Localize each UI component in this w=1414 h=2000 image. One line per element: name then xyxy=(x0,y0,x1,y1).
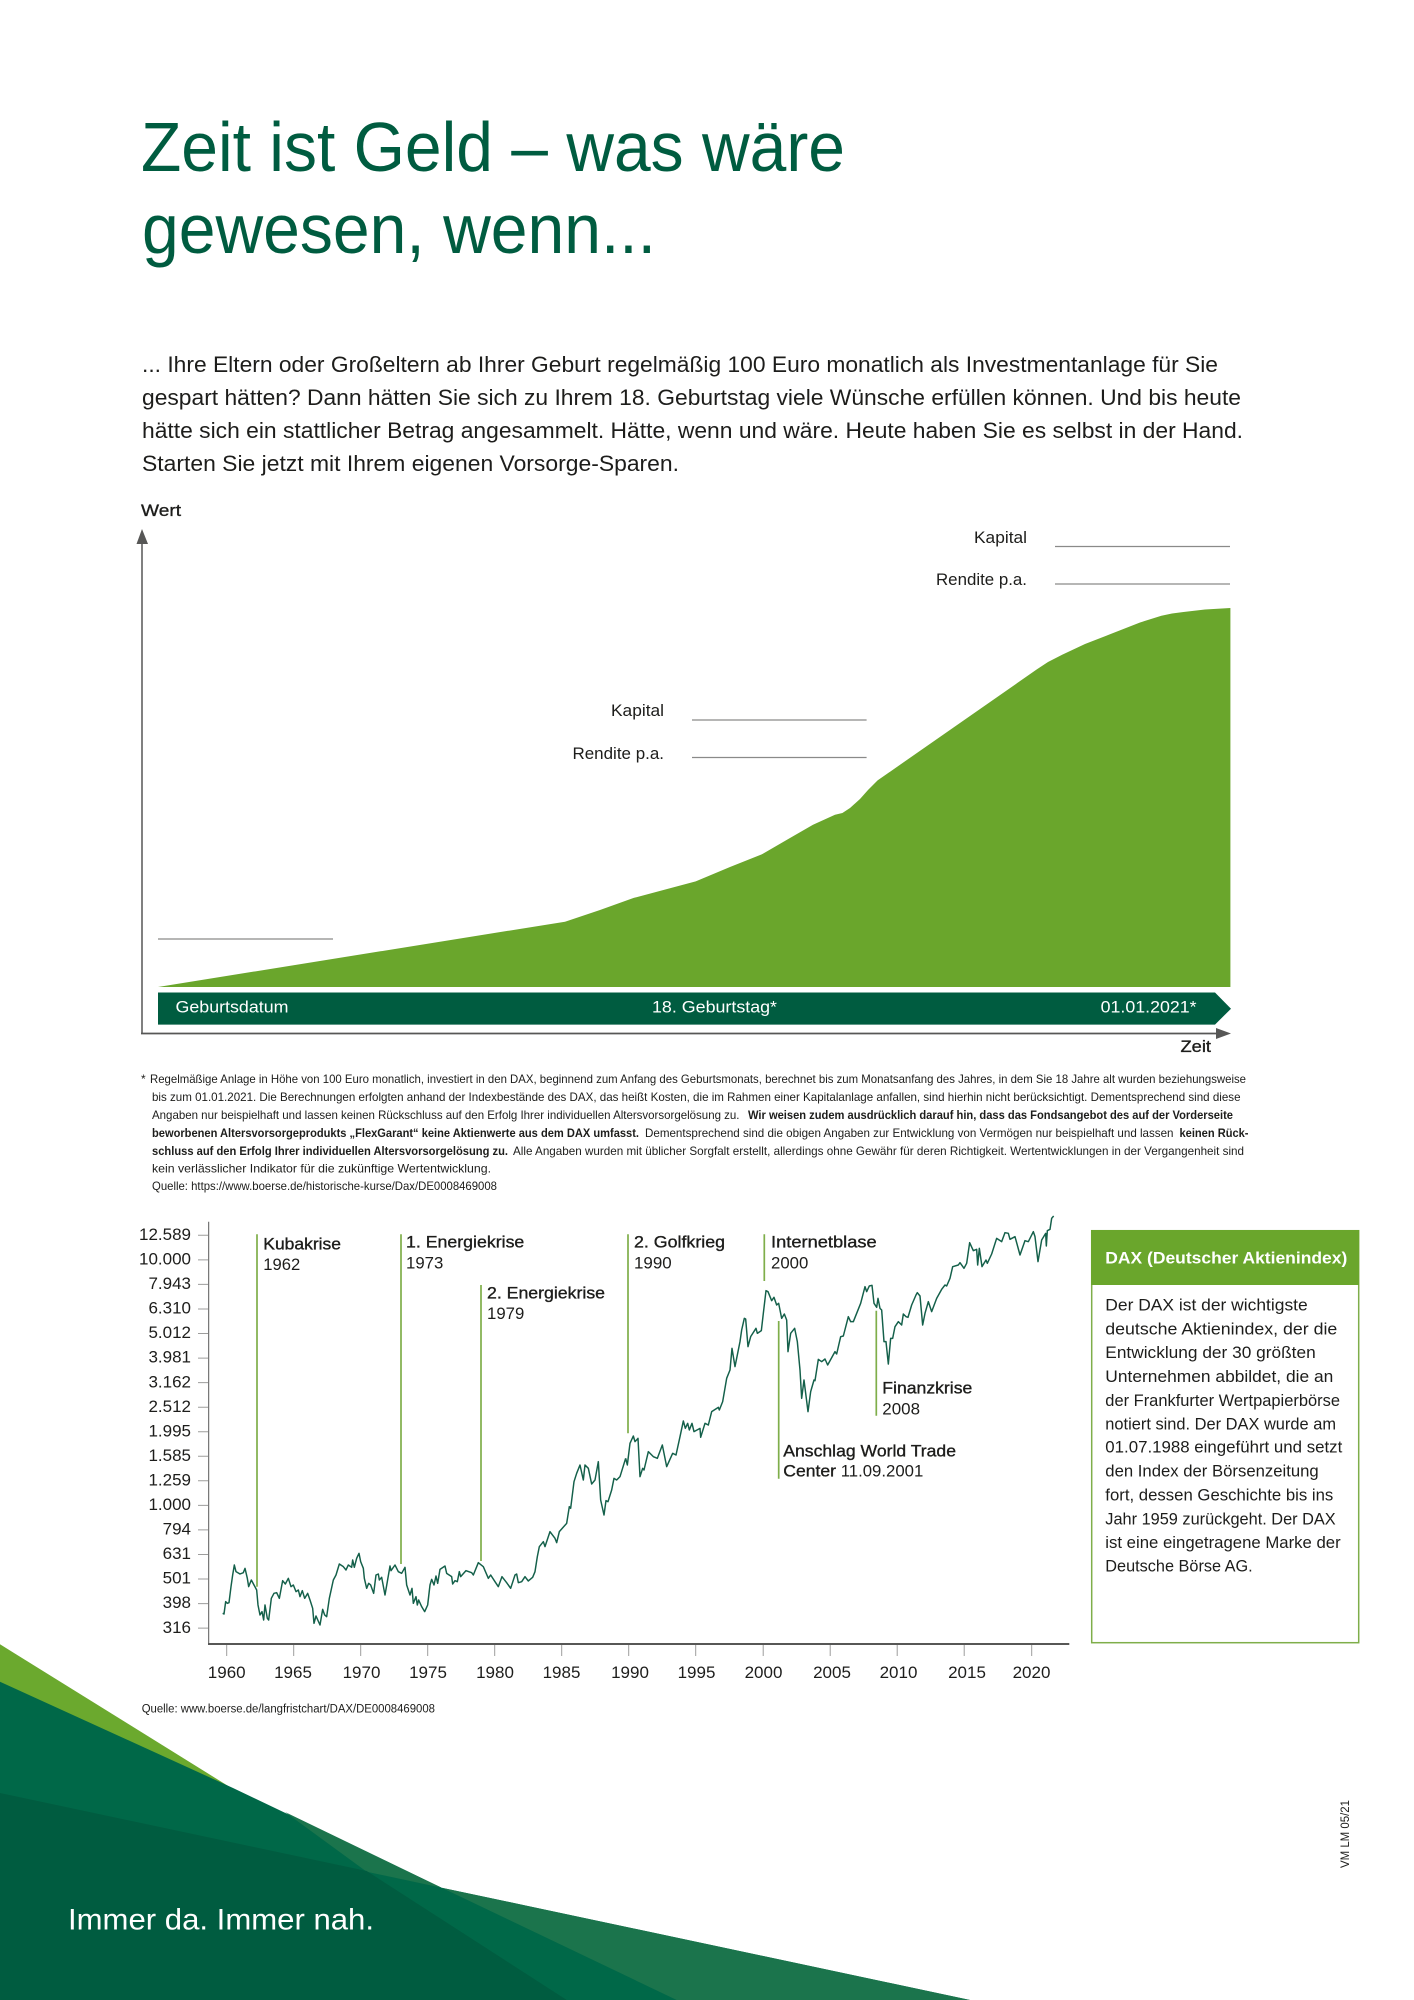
fields at 18th birthday: Kapital xyxy=(611,701,664,720)
panel text: Unternehmen abbildet, die an xyxy=(1105,1367,1333,1386)
chart source: Quelle: www.boerse.de/langfristchart/DAX/DE0008469008 xyxy=(142,1704,435,1716)
panel text: Jahr 1959 zurückgeht. Der DAX xyxy=(1105,1510,1336,1529)
intro text block: gespart hätten? Dann hätten Sie sich zu Ihrem 18. Geburtstag viele Wünsche erfüllen können. Und bis heute xyxy=(142,385,1241,410)
label: 2. Energiekrise xyxy=(487,1283,605,1323)
y axis labels: 631 xyxy=(163,1544,191,1563)
x axis year labels: 1960 xyxy=(208,1663,246,1682)
axes xyxy=(208,1222,210,1644)
y axis labels: 1.585 xyxy=(148,1446,191,1465)
panel heading xyxy=(1091,1230,1359,1285)
intro text block xyxy=(142,352,1243,476)
panel text: notiert sind. Der DAX wurde am xyxy=(1105,1414,1336,1433)
y axis labels: 1.995 xyxy=(148,1421,191,1440)
y axis labels: 1.259 xyxy=(148,1470,191,1490)
crisis marker lines xyxy=(257,1234,876,1587)
y axis labels: 1.000 xyxy=(148,1495,191,1514)
panel text: 01.07.1988 eingeführt und setzt xyxy=(1105,1438,1343,1457)
label: Anschlag World Trade Center: Anschlag World Trade xyxy=(783,1442,956,1461)
fields at 18th birthday xyxy=(572,701,867,763)
footnote: bis zum 01.01.2021. Die Berechnungen erfolgten anhand der Indexbestände des DAX, das heißt Kosten, die im Rahmen einer Kapitalanlage anfallen, sind hierhin nicht berücksichtigt. Dementsprechend sind diese xyxy=(152,1090,1241,1104)
title xyxy=(141,108,845,268)
x axis year labels: 1975 xyxy=(409,1663,447,1682)
footnote: Dementsprechend sind die obigen Angaben zur Entwicklung von Vermögen nur beispielhaft und lassen xyxy=(645,1126,1174,1140)
panel text: deutsche Aktienindex, der die xyxy=(1105,1320,1337,1339)
panel text: fort, dessen Geschichte bis ins xyxy=(1105,1486,1333,1505)
y axis labels: 794 xyxy=(163,1520,191,1539)
DAX line chart xyxy=(139,1216,1069,1682)
label: 2. Golfkrieg: 2. Golfkrieg xyxy=(634,1233,725,1252)
label: 2. Golfkrieg xyxy=(634,1233,725,1272)
title: gewesen, wenn... xyxy=(142,190,656,268)
axis label: Zeit: Zeit xyxy=(1180,1037,1211,1056)
x axis year labels: 1965 xyxy=(274,1663,312,1682)
axis label: Wert: Wert xyxy=(141,501,181,520)
y axis labels xyxy=(139,1225,191,1637)
intro text block: ... Ihre Eltern oder Großeltern ab Ihrer Geburt regelmäßig 100 Euro monatlich als Investmentanlage für Sie xyxy=(142,352,1218,377)
footnote xyxy=(141,1072,1248,1193)
label: Anschlag World Trade Center xyxy=(783,1442,956,1481)
footnote: * xyxy=(141,1072,146,1086)
fields at end date xyxy=(936,528,1230,589)
footnote: beworbenen Altersvorsorgeprodukts „FlexGarant“ keine Aktienwerte aus dem DAX umfasst. xyxy=(152,1126,639,1140)
y axis labels: 501 xyxy=(163,1569,191,1588)
y axis labels: 12.589 xyxy=(139,1225,191,1244)
background swoosh shapes xyxy=(0,1644,970,2000)
x axis year labels: 2005 xyxy=(813,1663,851,1682)
y axis labels: 316 xyxy=(163,1618,191,1637)
label: Kubakrise: 1962 xyxy=(263,1255,300,1274)
label: 2. Golfkrieg: 1990 xyxy=(634,1253,672,1272)
x axis year labels: 2010 xyxy=(880,1663,917,1682)
footnote: Quelle: https://www.boerse.de/historische-kurse/Dax/DE0008469008 xyxy=(152,1179,497,1193)
y axis labels: 6.310 xyxy=(148,1299,191,1318)
label: 1. Energiekrise: 1. Energiekrise xyxy=(406,1233,524,1252)
label: Kubakrise xyxy=(263,1234,341,1274)
footnote: Wir weisen zudem ausdrücklich darauf hin, dass das Fondsangebot des auf der Vorderseite xyxy=(748,1108,1233,1122)
x axis year labels: 1985 xyxy=(543,1663,580,1682)
fields at end date: Rendite p.a. xyxy=(936,570,1027,589)
footnote: Angaben nur beispielhaft und lassen keinen Rückschluss auf den Erfolg Ihrer individuellen Altersvorsorgelösung zu. xyxy=(152,1108,740,1122)
x axis year labels: 2000 xyxy=(745,1663,782,1682)
y axis labels: 3.981 xyxy=(148,1348,191,1367)
y axis labels: 398 xyxy=(163,1593,191,1612)
footnote: Regelmäßige Anlage in Höhe von 100 Euro monatlich, investiert in den DAX, beginnend zum Anfang des Geburtsmonats, berechnet bis zum Monatsanfang des Jahres, in dem Sie 18 Jahre alt wurden beziehungsweise xyxy=(150,1072,1246,1086)
panel text: der Frankfurter Wertpapierbörse xyxy=(1105,1391,1340,1410)
label: 2. Energiekrise: 1979 xyxy=(487,1304,524,1323)
label: Anschlag World Trade Center: Center xyxy=(783,1462,836,1481)
green area xyxy=(158,608,1230,987)
y axis labels: 5.012 xyxy=(148,1323,191,1342)
panel text: Deutsche Börse AG. xyxy=(1105,1557,1253,1576)
label: Internetblase xyxy=(771,1233,877,1272)
footnote: kein verlässlicher Indikator für die zukünftige Wertentwicklung. xyxy=(152,1162,491,1176)
label: Finanzkrise: 2008 xyxy=(882,1399,920,1418)
y axis labels: 3.162 xyxy=(148,1372,191,1391)
footnote: Alle Angaben wurden mit üblicher Sorgfalt erstellt, allerdings ohne Gewähr für deren Richtigkeit. Wertentwicklungen in der Vergangenheit sind xyxy=(513,1144,1244,1158)
panel text xyxy=(1105,1296,1343,1576)
intro text block: Starten Sie jetzt mit Ihrem eigenen Vorsorge-Sparen. xyxy=(142,451,679,476)
panel text: den Index der Börsenzeitung xyxy=(1105,1462,1319,1481)
timeline arrow bar: 18. Geburtstag* xyxy=(652,998,777,1016)
label: Internetblase: Internetblase xyxy=(771,1233,877,1252)
footnote: keinen Rück- xyxy=(1180,1126,1248,1140)
y axis labels: 2.512 xyxy=(148,1397,191,1416)
slogan: Immer da. Immer nah. xyxy=(68,1904,374,1936)
timeline arrow bar: Geburtsdatum xyxy=(176,998,288,1016)
chart axes xyxy=(136,529,1231,1039)
y axis labels: 10.000 xyxy=(139,1250,191,1268)
panel text: Entwicklung der 30 größten xyxy=(1105,1343,1316,1362)
x axis year labels: 1970 xyxy=(343,1663,380,1682)
x axis year labels xyxy=(208,1663,1050,1682)
label: 1. Energiekrise xyxy=(406,1233,524,1272)
document code: VM LM 05/21 xyxy=(1340,1800,1352,1868)
label: Internetblase: 2000 xyxy=(771,1253,808,1272)
label: Kubakrise: Kubakrise xyxy=(263,1234,341,1253)
timeline arrow bar xyxy=(158,992,1231,1025)
panel heading: DAX (Deutscher Aktienindex) xyxy=(1105,1248,1347,1267)
x axis year labels: 2015 xyxy=(948,1663,986,1682)
entry line at birth xyxy=(158,938,333,940)
x axis year labels: 1995 xyxy=(678,1663,715,1682)
title: Zeit ist Geld – was wäre xyxy=(141,108,845,186)
x axis year labels: 1990 xyxy=(611,1663,649,1682)
x axis year labels: 2020 xyxy=(1013,1663,1050,1682)
label: Finanzkrise xyxy=(882,1379,972,1418)
panel text: ist eine eingetragene Marke der xyxy=(1105,1533,1341,1552)
axis tick marks xyxy=(198,1235,1032,1656)
footnote: schluss auf den Erfolg Ihrer individuellen Altersvorsorgelösung zu. xyxy=(152,1144,508,1158)
label: Finanzkrise: Finanzkrise xyxy=(882,1379,972,1398)
fields at end date: Kapital xyxy=(974,528,1027,547)
growth chart xyxy=(136,501,1231,1056)
x axis year labels: 1980 xyxy=(476,1663,514,1682)
panel: DAX info box xyxy=(1091,1230,1359,1643)
label: Anschlag World Trade Center: 11.09.2001 xyxy=(841,1462,923,1481)
DAX series line, part 1 xyxy=(223,1458,626,1625)
panel text: Der DAX ist der wichtigste xyxy=(1105,1296,1308,1315)
fields at 18th birthday: Rendite p.a. xyxy=(572,744,664,763)
timeline arrow bar: 01.01.2021* xyxy=(1101,998,1197,1016)
label: 2. Energiekrise: 2. Energiekrise xyxy=(487,1283,605,1302)
label: 1. Energiekrise: 1973 xyxy=(406,1253,443,1272)
DAX series line, part 2 xyxy=(626,1216,1054,1477)
intro text block: hätte sich ein stattlicher Betrag angesammelt. Hätte, wenn und wäre. Heute haben Sie es selbst in der Hand. xyxy=(142,418,1243,443)
y axis labels: 7.943 xyxy=(148,1274,191,1293)
